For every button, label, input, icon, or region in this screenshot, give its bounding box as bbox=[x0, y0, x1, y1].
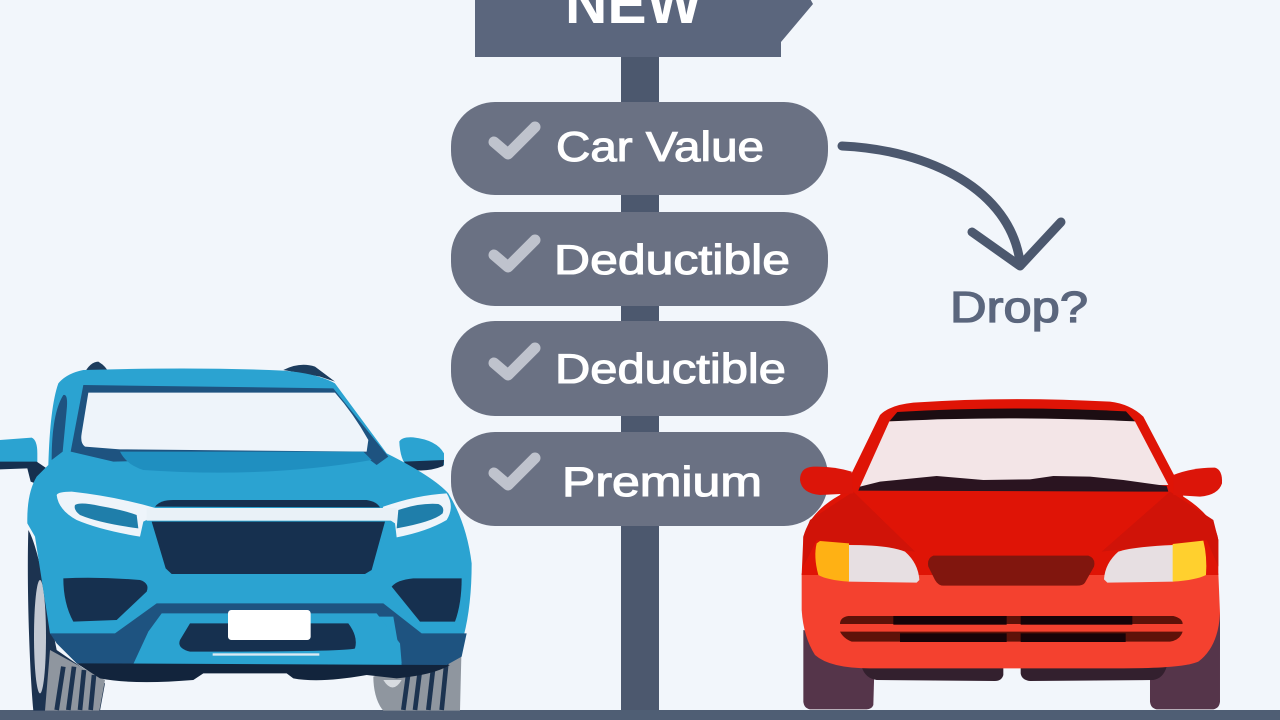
grille bar bbox=[147, 508, 397, 521]
signpost pole bbox=[621, 50, 659, 712]
windshield bbox=[860, 418, 1168, 487]
license plate bbox=[228, 610, 311, 640]
pill: Car Value: Car Value bbox=[556, 123, 764, 170]
grille top slot bbox=[155, 500, 380, 507]
body shell bbox=[27, 368, 472, 665]
left headlight bbox=[57, 492, 160, 537]
upper body and hood bbox=[802, 399, 1218, 575]
underbody bbox=[862, 667, 1167, 681]
pill: Car Value bbox=[451, 102, 828, 195]
grille bbox=[928, 556, 1094, 586]
pill: Deductible bbox=[451, 212, 828, 306]
right headlight bbox=[1104, 541, 1206, 583]
windshield frame bbox=[71, 385, 388, 465]
lower air intake bbox=[179, 623, 356, 652]
pill: Deductible second bbox=[451, 321, 828, 416]
pill: Deductible: Deductible bbox=[554, 236, 790, 283]
mirrors bbox=[800, 467, 1222, 497]
left headlight bbox=[815, 541, 919, 583]
lower body bbox=[802, 573, 1220, 668]
pill: Premium: Premium bbox=[562, 458, 762, 505]
right fog vent bbox=[392, 578, 462, 622]
blue car bbox=[0, 362, 472, 711]
pill: Premium bbox=[451, 432, 828, 526]
tires bbox=[803, 613, 1220, 709]
left mirror bbox=[0, 438, 47, 485]
main grille bbox=[152, 522, 385, 574]
left tire bbox=[28, 530, 105, 711]
right headlight bbox=[380, 493, 451, 537]
arrow: value drop bbox=[842, 146, 1061, 266]
windshield glass bbox=[81, 393, 368, 452]
ground line bbox=[0, 710, 1280, 720]
underbody bbox=[77, 663, 450, 682]
bumper vents bbox=[840, 616, 1183, 642]
label: Drop?: Drop? bbox=[950, 283, 1088, 332]
bumper highlight bbox=[213, 653, 319, 656]
wipers bbox=[858, 476, 1168, 492]
top sign: NEW bbox=[475, 0, 813, 57]
right mirror bbox=[399, 437, 444, 470]
lower bumper panel bbox=[133, 613, 402, 664]
side window bbox=[52, 395, 67, 460]
hood side shading bbox=[803, 492, 1218, 567]
roof rails bbox=[83, 362, 335, 382]
right tire bbox=[373, 643, 462, 711]
pill: Deductible second: Deductible bbox=[555, 345, 786, 392]
lower bumper dark band bbox=[50, 603, 467, 665]
hood crease bbox=[120, 452, 372, 473]
sun strip bbox=[889, 408, 1135, 421]
left fog vent bbox=[63, 578, 147, 622]
red car bbox=[800, 399, 1222, 709]
